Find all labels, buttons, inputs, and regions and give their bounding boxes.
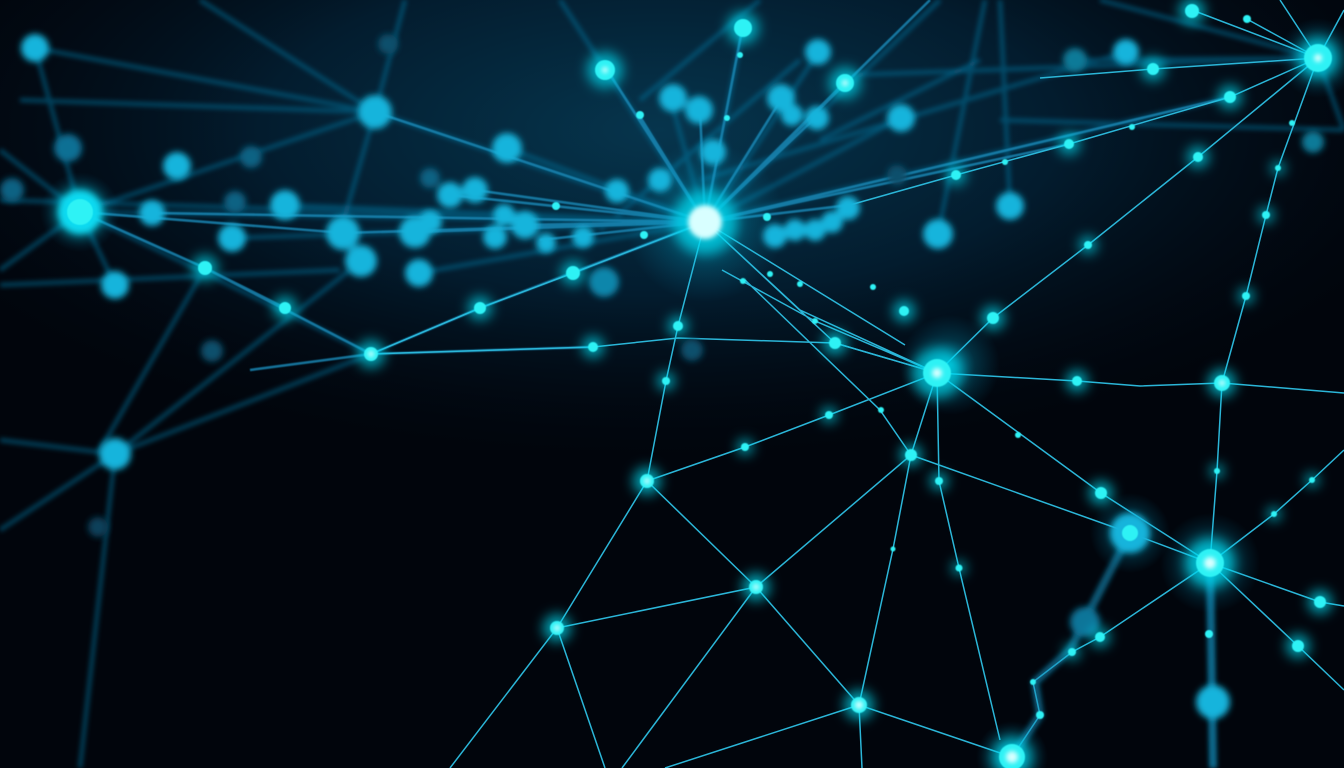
- sharp foreground lines: [371, 0, 1344, 768]
- mid-depth lines: [80, 0, 1230, 370]
- hub highlights: [368, 54, 1322, 763]
- wide glowing branch bottom right: [1012, 533, 1213, 768]
